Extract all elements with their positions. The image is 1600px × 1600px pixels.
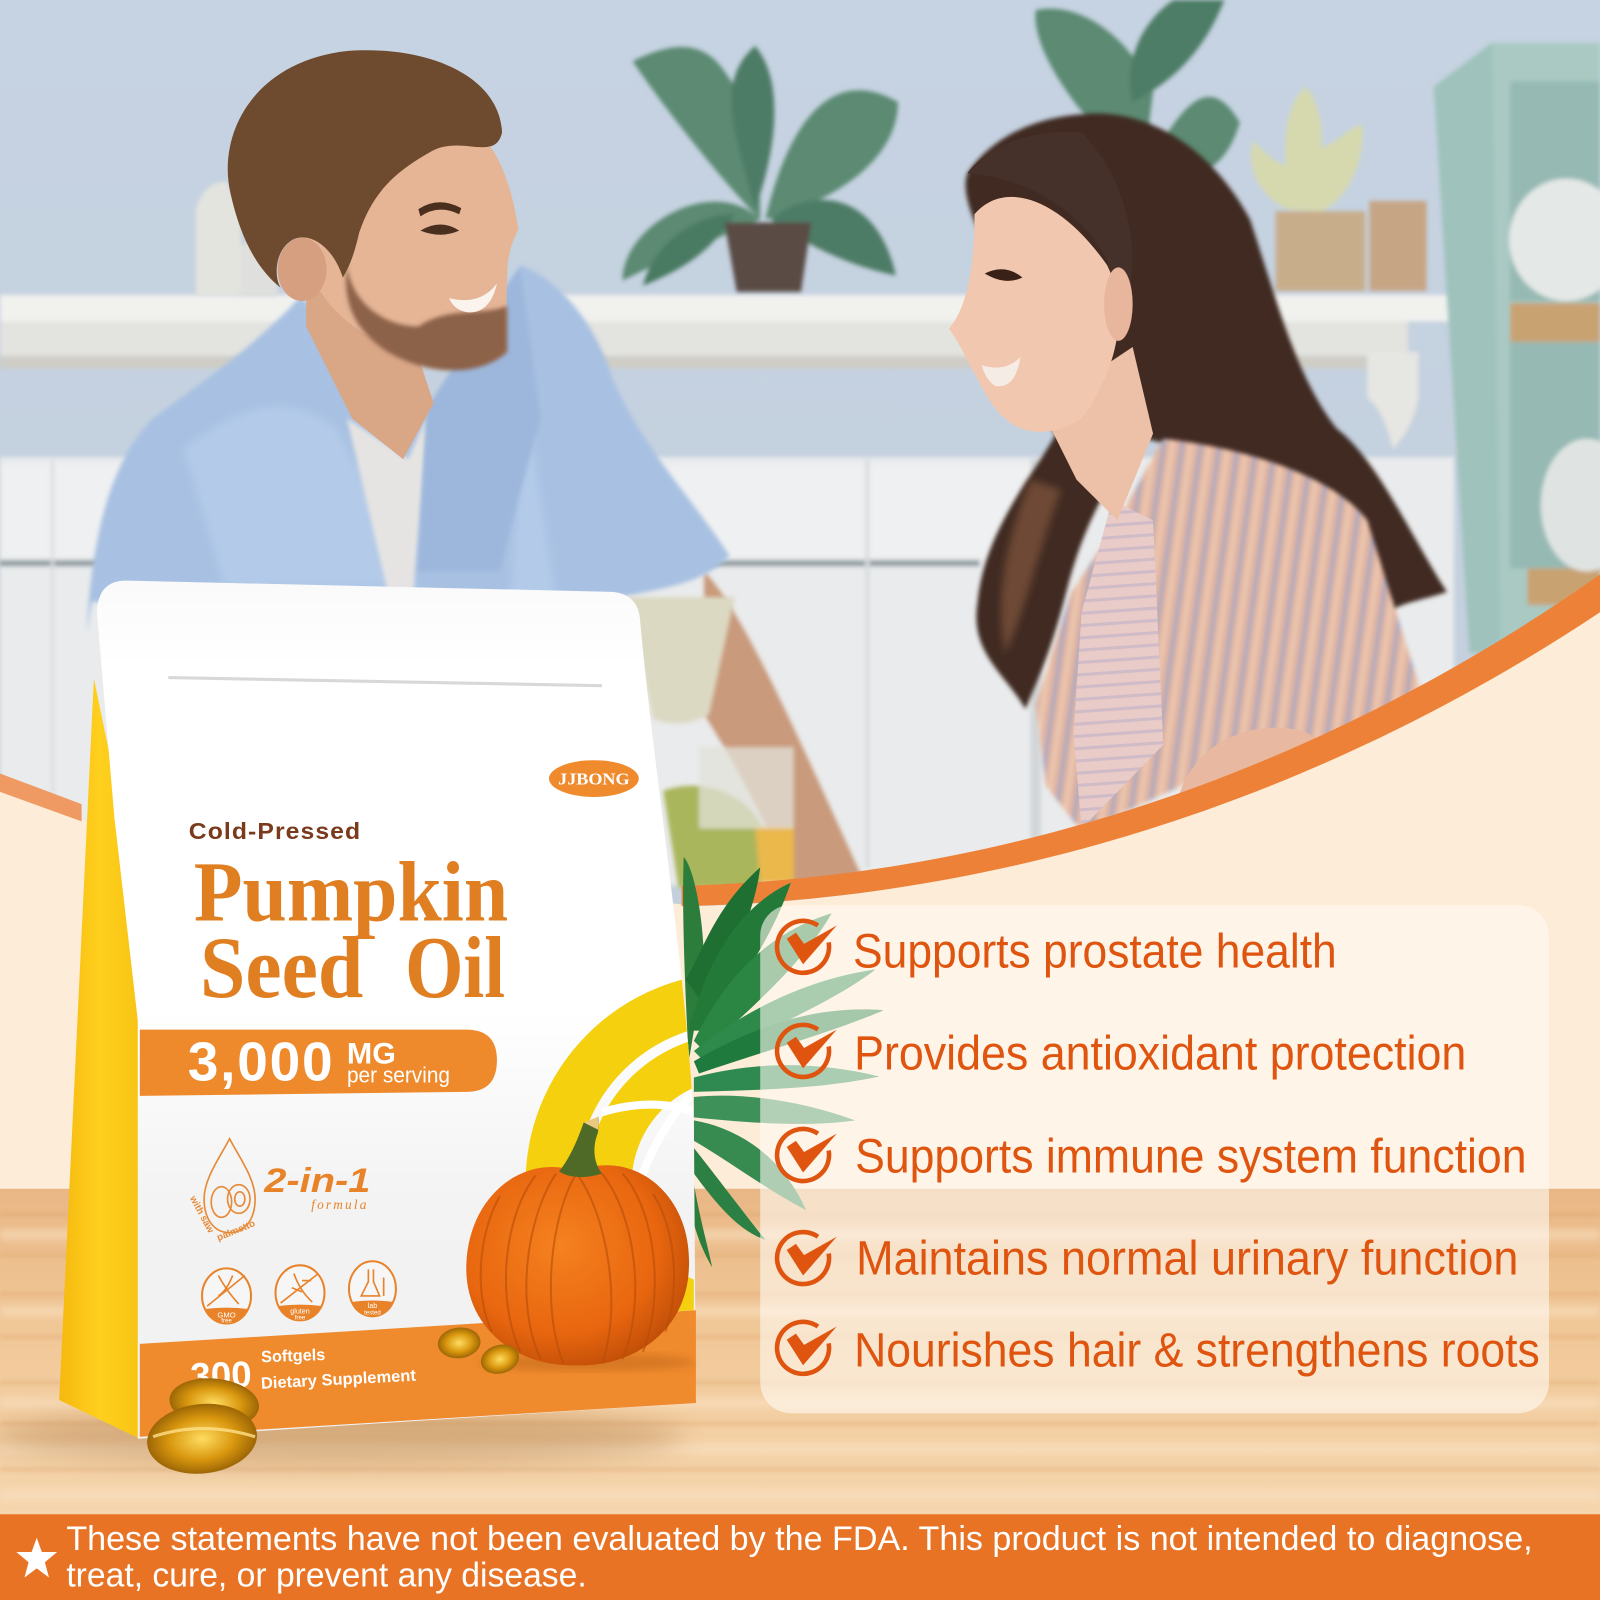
pouch orange bottom band <box>140 1310 696 1437</box>
product name: Pumpkin <box>194 844 508 939</box>
product: palm leaves <box>683 857 884 1267</box>
man beard <box>346 265 507 370</box>
product name: Oil <box>405 919 505 1016</box>
icon: GMO free: GMO <box>217 1310 236 1319</box>
woman blouse <box>1036 439 1423 832</box>
pumpkin body <box>466 1165 689 1365</box>
man forearm <box>704 571 862 886</box>
background: white shelf <box>0 295 1454 449</box>
icon: lab tested <box>349 1261 396 1316</box>
background: kitchen wall <box>0 0 1600 918</box>
2-in-1 formula label <box>263 1162 370 1212</box>
pumpkin stem <box>559 1118 602 1177</box>
background: teal cabinet <box>1434 43 1600 653</box>
benefit 4: urinary: Maintains normal urinary function <box>856 1232 1518 1285</box>
background: orange curved band left <box>0 773 82 821</box>
pouch front <box>97 581 696 1439</box>
pumpkin shadow <box>480 1353 694 1371</box>
woman arm <box>1173 728 1327 821</box>
man eye <box>418 202 461 235</box>
icon: oil drop with seeds <box>187 1139 257 1244</box>
woman eye <box>985 269 1022 281</box>
disclaimer text <box>66 1520 1533 1595</box>
man hair <box>228 50 502 288</box>
figure: woman <box>949 114 1447 832</box>
man smile <box>449 284 497 312</box>
panel: translucent benefits background <box>760 905 1549 1413</box>
pouch yellow side gusset <box>59 679 140 1439</box>
background: wooden table <box>0 1189 1600 1520</box>
2-in-1 formula label: formula <box>311 1197 367 1212</box>
dosage pill <box>140 1030 497 1096</box>
figure: man <box>87 50 862 886</box>
object: bowl and glass <box>628 597 794 888</box>
icon: lab tested: lab <box>368 1302 377 1310</box>
softgel count: Dietary Supplement <box>260 1367 417 1393</box>
icon: GMO free: free <box>221 1317 232 1324</box>
woman hair highlight <box>1001 480 1061 653</box>
shadow under bag <box>0 1410 684 1463</box>
woman neck <box>1041 347 1153 520</box>
icon: lab tested: tested <box>364 1309 381 1316</box>
icon: star <box>16 1538 57 1578</box>
dosage pill: per serving <box>347 1063 450 1088</box>
icon: oil drop with seeds: with saw <box>187 1193 216 1235</box>
background: orange curved band right <box>682 574 1600 906</box>
man lapel <box>418 267 541 571</box>
benefit 1: prostate: Supports prostate health <box>853 925 1337 978</box>
pouch yellow arcs <box>526 980 694 1312</box>
man ear <box>278 238 327 301</box>
man face <box>296 128 518 367</box>
woman ear <box>1104 267 1133 341</box>
woman long hair <box>966 114 1447 709</box>
brand badge <box>549 760 639 797</box>
background: shelf decor <box>196 87 1427 296</box>
2-in-1 formula label: 2-in-1 <box>263 1162 370 1200</box>
man t-shirt <box>347 413 429 592</box>
pouch zipper line <box>168 678 602 686</box>
footer disclaimer bar <box>0 1514 1600 1600</box>
softgel count <box>190 1346 417 1397</box>
man shirt <box>87 265 730 633</box>
benefit 5: hair: Nourishes hair & strengthens roots <box>854 1324 1540 1377</box>
disclaimer text: These statements have not been evaluated by the FDA. This product is not intended to diagnose, <box>66 1520 1533 1558</box>
benefit 3: immune: Supports immune system function <box>855 1130 1527 1183</box>
man shirt shadows <box>184 406 556 597</box>
icon: oil drop with seeds: palmetto <box>215 1218 257 1244</box>
product name <box>194 844 508 1016</box>
benefit list <box>777 921 1540 1377</box>
background: cream curved panel <box>0 610 1600 1199</box>
background: plant with pot <box>622 46 898 292</box>
softgels foreground <box>144 1374 261 1479</box>
softgels near pumpkin <box>436 1325 523 1378</box>
woman smile <box>982 357 1020 386</box>
product: pouch <box>59 580 696 1439</box>
softgel count: 300 <box>190 1354 252 1397</box>
icon: gluten free: gluten <box>290 1307 310 1315</box>
woman blouse front <box>1073 500 1163 829</box>
disclaimer text: treat, cure, or prevent any disease. <box>66 1557 587 1595</box>
dosage pill: 3,000 <box>188 1031 333 1093</box>
benefit 2: antioxidant: Provides antioxidant protection <box>854 1027 1466 1080</box>
pumpkin ribs <box>481 1173 674 1363</box>
woman hair front <box>967 132 1132 316</box>
softgel count: Softgels <box>261 1346 326 1366</box>
man neck <box>306 281 434 459</box>
background: white tiled lower wall <box>0 457 1454 886</box>
brand badge: JJBONG <box>558 770 630 789</box>
dosage pill: MG <box>347 1037 396 1070</box>
icon: GMO free <box>202 1268 251 1324</box>
woman face <box>949 197 1119 432</box>
background: second plant <box>1035 0 1240 177</box>
icon: gluten free: free <box>295 1314 306 1321</box>
cold-pressed label: Cold-Pressed <box>189 818 361 844</box>
product name: Seed <box>200 919 363 1016</box>
icon: gluten free <box>276 1265 324 1321</box>
pumpkin <box>466 1116 694 1371</box>
